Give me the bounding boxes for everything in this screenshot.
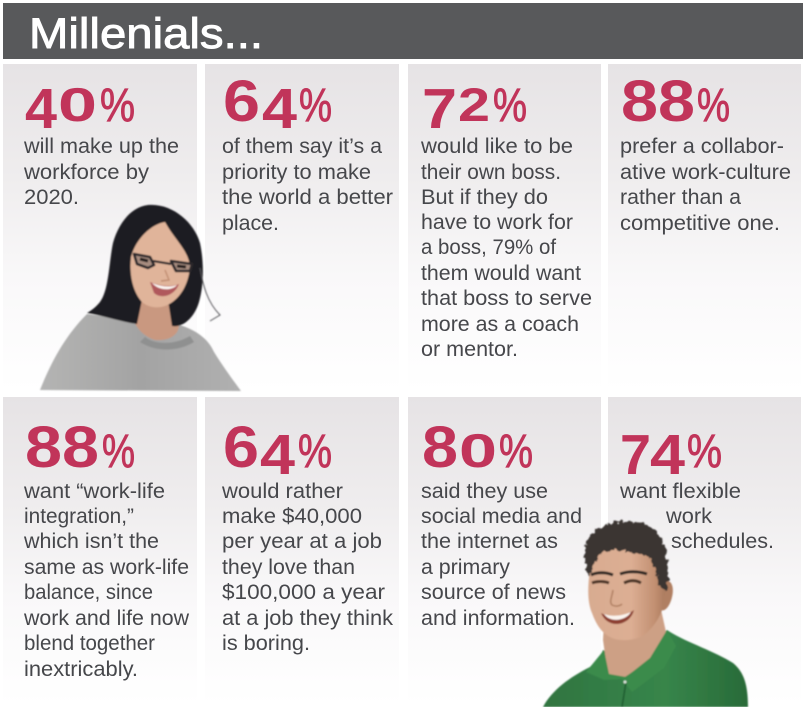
text: integration: [23, 480, 190, 681]
text: integration: which isn’t the: [23, 530, 159, 553]
panel: 64% priority: [205, 64, 399, 391]
text: own boss: their own boss.: [421, 161, 561, 184]
stat: 64%: 6: [223, 69, 260, 134]
text: better world: the world a better: [222, 186, 393, 209]
text: love job: $100,000 a year: [222, 581, 385, 604]
text: own boss: have to work for: [421, 211, 573, 234]
text: workforce: [23, 135, 179, 209]
text: integration: integration,”: [24, 505, 134, 528]
text: love job: would rather: [221, 480, 343, 503]
text: social media: and information.: [421, 607, 575, 630]
stat: 88%: %: [102, 424, 135, 477]
stat: 64%: 4: [262, 77, 297, 141]
stat: 74%: %: [687, 424, 722, 477]
stat: 72%: %: [493, 78, 527, 131]
text: better world: [222, 135, 393, 235]
stat: 80%: 8: [422, 415, 458, 480]
text: workforce: will make up the: [23, 135, 179, 158]
stat: 88%: 8: [62, 415, 99, 480]
title bar: [3, 3, 803, 59]
stat: 88%: 8: [25, 415, 62, 480]
text: own boss: would like to be: [420, 135, 573, 158]
text: integration: inextricably.: [24, 658, 138, 681]
stat: 40%: 0: [58, 78, 97, 131]
text: social media: a primary: [421, 556, 510, 579]
text: flexible: [619, 480, 774, 553]
text: integration: same as work-life: [24, 556, 189, 579]
text: flexible: schedules.: [671, 530, 774, 553]
text: own boss: But if they do: [421, 186, 548, 209]
text: social media: the internet as: [421, 530, 558, 553]
text: love job: at a job they think: [222, 607, 394, 630]
text: better world: place.: [222, 212, 279, 235]
panel: 40% workforce: [3, 64, 197, 391]
text: own boss: or mentor.: [421, 338, 518, 361]
text: workforce: workforce by: [23, 161, 150, 184]
text: integration: blend together: [24, 632, 155, 655]
photo: man in green polo: [543, 521, 748, 707]
text: social media: source of news: [421, 581, 566, 604]
photo: woman with glasses: [40, 205, 241, 391]
text: love job: is boring.: [222, 632, 310, 655]
text: collaborative: rather than a: [620, 186, 741, 209]
text: own boss: them would want: [421, 262, 581, 285]
text: collaborative: prefer a collabor-: [620, 135, 784, 158]
text: love job: make $40,000: [222, 505, 362, 528]
stat: 40%: 4: [25, 77, 57, 141]
text: love job: they love than: [222, 556, 355, 579]
text: own boss: [420, 135, 592, 361]
text: workforce: 2020.: [24, 186, 79, 209]
text: own boss: a boss, 79% of: [421, 236, 556, 259]
panel: 80% social media: [408, 397, 601, 705]
text: integration: balance, since: [24, 581, 153, 604]
text: social media: social media and: [421, 505, 582, 528]
text: better world: priority to make: [222, 161, 371, 184]
stat: 64%: %: [299, 78, 332, 131]
panel: 88% integration: [3, 397, 197, 705]
stat: 80%: %: [499, 424, 533, 477]
text: collaborative: [620, 135, 791, 235]
text: own boss: that boss to serve: [421, 287, 592, 310]
panel: 64% love job: [205, 397, 399, 705]
text: flexible: want flexible: [619, 480, 741, 503]
text: own boss: more as a coach: [421, 313, 579, 336]
text: love job: [221, 480, 394, 655]
stat: 64%: 4: [260, 423, 295, 487]
stat: 40%: %: [100, 78, 135, 131]
text: collaborative: ative work-culture: [620, 161, 791, 184]
panel: 88% collaborative: [608, 64, 801, 391]
text: love job: per year at a job: [222, 530, 382, 553]
panel: 74% flexible: [608, 397, 801, 705]
text: better world: of them say it’s a: [222, 135, 382, 158]
text: integration: want “work-life: [23, 480, 165, 503]
title: Millenials...: [29, 10, 263, 58]
text: flexible: work: [665, 505, 713, 528]
stat: 74%: 4: [650, 423, 685, 487]
stat: 88%: 8: [658, 69, 695, 134]
text: integration: work and life now: [23, 607, 190, 630]
stat: 72%: 7: [422, 77, 457, 141]
stat: 64%: 6: [223, 415, 259, 480]
stat: 74%: 7: [620, 423, 651, 487]
stat: 88%: %: [697, 78, 730, 131]
text: collaborative: competitive one.: [620, 212, 780, 235]
stat: 64%: %: [298, 424, 332, 477]
text: social media: said they use: [421, 480, 548, 503]
text: social media: [421, 480, 582, 630]
stat: 88%: 8: [621, 69, 658, 134]
panel: 72% own boss: [408, 64, 601, 391]
stat: 80%: 0: [459, 424, 497, 477]
stat: 72%: 2: [458, 78, 490, 131]
